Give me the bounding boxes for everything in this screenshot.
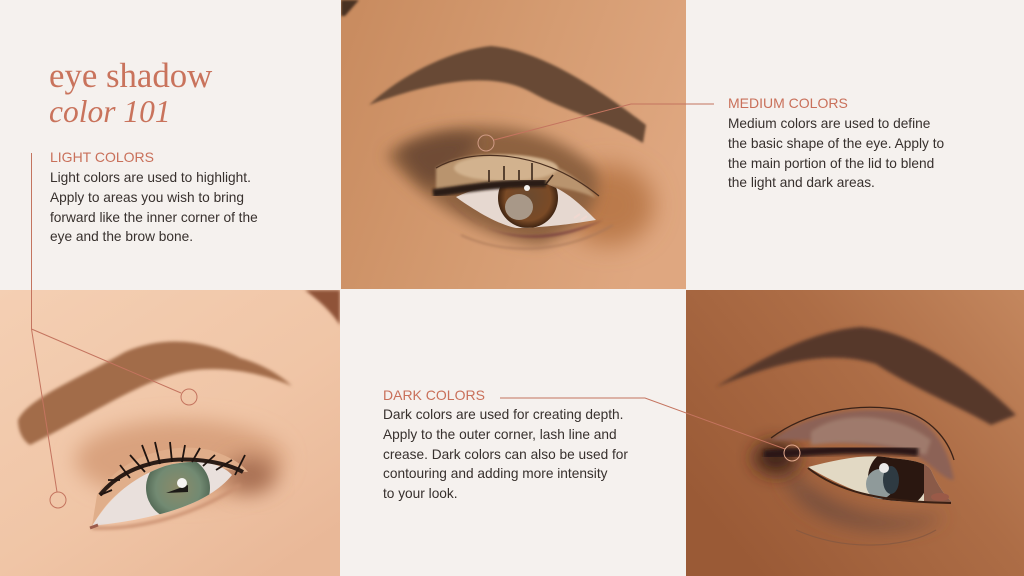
text: dark colors: crease. Dark colors can also be used for [383, 447, 628, 462]
text: dark colors: Dark colors are used for creating depth. [383, 407, 623, 422]
text: medium colors: the light and dark areas. [728, 175, 875, 190]
text: dark colors: Apply to the outer corner, lash line and [383, 427, 617, 442]
text: medium colors: the main portion of the lid to blend [728, 156, 934, 171]
leader: light colors to inner corner [32, 329, 66, 508]
eyelid [92, 448, 248, 526]
photo: dark colors eye [686, 290, 1024, 576]
title [49, 56, 212, 129]
eye [92, 462, 232, 526]
photo: medium colors eye [341, 0, 686, 289]
text: light colors: Light colors are used to highlight. [50, 170, 251, 185]
title: color 101 [49, 94, 171, 129]
text: light colors: Apply to areas you wish to bring [50, 190, 244, 205]
text: light colors: forward like the inner corner of the [50, 210, 258, 225]
text: dark colors: contouring and adding more intensity [383, 466, 607, 481]
eye [446, 198, 603, 238]
eyebrow [716, 327, 1016, 425]
text: dark colors: to your look. [383, 486, 458, 501]
title: eye shadow [49, 56, 212, 95]
photo: light colors eye [0, 290, 340, 576]
leader: medium colors to lid [478, 104, 714, 151]
eyebrow [18, 342, 292, 445]
heading: medium colors: MEDIUM COLORS [728, 95, 848, 111]
leader: dark colors to outer corner [500, 398, 800, 461]
eyelid [771, 410, 954, 480]
heading: light colors: LIGHT COLORS [50, 149, 154, 165]
text: medium colors: Medium colors are used to define [728, 116, 930, 131]
eye [808, 456, 952, 502]
text: dark colors [383, 407, 628, 501]
under-eye shadow [781, 465, 946, 529]
text: light colors: eye and the brow bone. [50, 229, 193, 244]
text: medium colors: the basic shape of the eye. Apply to [728, 136, 944, 151]
lash line [764, 449, 918, 455]
heading: dark colors: DARK COLORS [383, 387, 485, 403]
text: medium colors [728, 116, 944, 190]
leader: light colors to brow bone [32, 153, 197, 405]
eyebrow [369, 46, 646, 143]
eyelid [436, 154, 596, 198]
text: light colors [50, 170, 258, 244]
